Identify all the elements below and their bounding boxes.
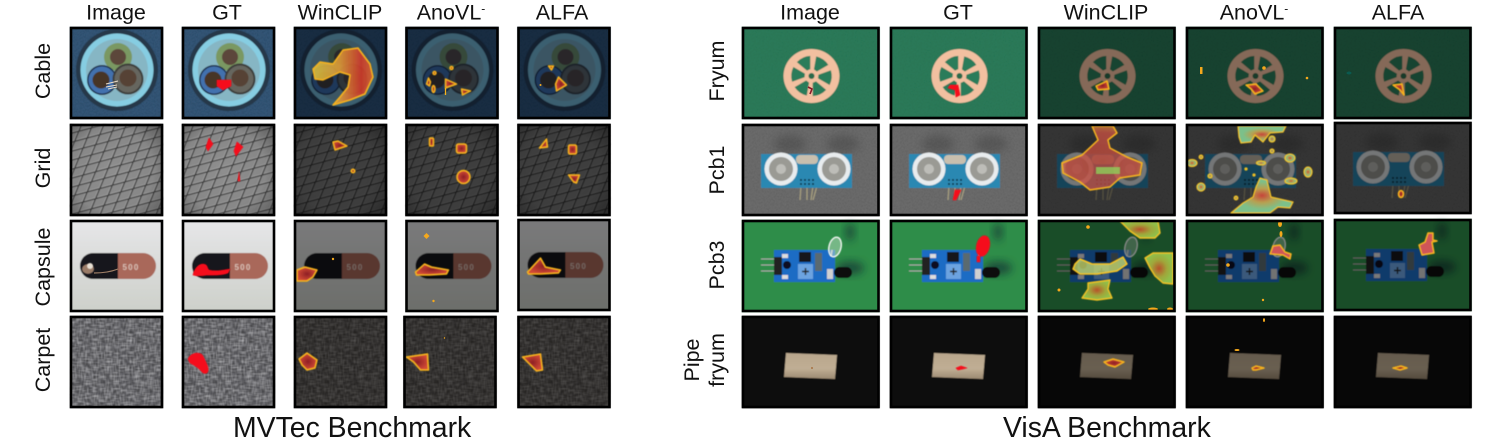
fryum image bbox=[742, 27, 880, 119]
cable ALFA bbox=[518, 27, 610, 119]
pipe fryum GT bbox=[890, 316, 1028, 408]
column headings: VisA bbox=[780, 0, 1425, 24]
column headings: MVTec: GT bbox=[212, 0, 242, 24]
column headings: VisA: ALFA bbox=[1372, 0, 1425, 24]
column headings: VisA: GT bbox=[943, 0, 973, 24]
row label: Cable: Cable bbox=[31, 43, 55, 99]
grid AnoVL bbox=[406, 124, 498, 216]
column headings: MVTec: Image bbox=[86, 0, 146, 24]
cable image bbox=[70, 27, 163, 119]
panel: MVTec benchmark bbox=[31, 0, 610, 444]
carpet WinCLIP bbox=[294, 316, 387, 408]
fryum AnoVL bbox=[1186, 27, 1324, 119]
capsule ALFA bbox=[518, 219, 610, 311]
row label: Capsule: Capsule bbox=[31, 228, 55, 306]
column headings: VisA: WinCLIP bbox=[1064, 0, 1148, 24]
pcb1 image bbox=[742, 124, 880, 216]
cable WinCLIP bbox=[294, 27, 387, 119]
pcb3 WinCLIP bbox=[1038, 220, 1176, 312]
row label: Fryum: Fryum bbox=[705, 41, 729, 101]
column headings: MVTec: ALFA bbox=[536, 0, 589, 24]
column headings: MVTec: WinCLIP bbox=[298, 0, 382, 24]
row label: Carpet: Carpet bbox=[31, 328, 55, 392]
column headings: MVTec: - bbox=[481, 2, 485, 16]
grid WinCLIP bbox=[294, 124, 387, 216]
column headings: MVTec bbox=[86, 0, 589, 24]
row label: Pcb1: Pcb1 bbox=[705, 145, 729, 195]
pcb1 WinCLIP bbox=[1038, 124, 1176, 216]
row label: Pipe fryum: fryum bbox=[705, 333, 729, 387]
pcb1 GT bbox=[890, 124, 1028, 216]
pcb1 AnoVL bbox=[1186, 124, 1324, 216]
pipe fryum image bbox=[742, 316, 880, 408]
carpet image bbox=[70, 316, 163, 408]
cable GT bbox=[182, 27, 275, 119]
pipe fryum ALFA bbox=[1334, 316, 1472, 408]
row label: Pcb3: Pcb3 bbox=[705, 240, 729, 290]
pipe fryum WinCLIP bbox=[1038, 316, 1176, 408]
grid GT bbox=[182, 124, 275, 216]
pcb3 image bbox=[742, 220, 880, 312]
pcb3 AnoVL bbox=[1186, 220, 1324, 312]
row label: Grid: Grid bbox=[31, 148, 55, 188]
row label: Pipe fryum bbox=[680, 333, 729, 387]
capsule image bbox=[70, 220, 163, 312]
column headings: VisA: - bbox=[1284, 2, 1288, 16]
pcb3 ALFA bbox=[1334, 219, 1472, 311]
capsule AnoVL bbox=[406, 220, 498, 312]
caption: VisA Benchmark: VisA Benchmark bbox=[1003, 412, 1212, 444]
column headings: VisA: Image bbox=[780, 0, 840, 24]
capsule WinCLIP bbox=[294, 220, 387, 312]
caption: MVTec Benchmark: MVTec Benchmark bbox=[233, 412, 472, 444]
fryum GT bbox=[890, 27, 1028, 119]
carpet AnoVL bbox=[404, 316, 496, 408]
carpet ALFA bbox=[518, 316, 610, 408]
panel: VisA benchmark bbox=[680, 0, 1472, 444]
pcb3 GT bbox=[890, 220, 1028, 312]
pipe fryum AnoVL bbox=[1186, 316, 1324, 408]
carpet GT bbox=[182, 316, 275, 408]
grid ALFA bbox=[518, 124, 610, 216]
fryum WinCLIP bbox=[1038, 27, 1176, 119]
row label: Pipe fryum: Pipe bbox=[680, 338, 704, 382]
column headings: VisA: AnoVL bbox=[1220, 0, 1284, 24]
pcb1 ALFA bbox=[1334, 122, 1472, 214]
capsule GT bbox=[182, 220, 275, 312]
cable AnoVL bbox=[406, 27, 498, 119]
column headings: MVTec: AnoVL bbox=[417, 0, 481, 24]
fryum ALFA bbox=[1334, 27, 1472, 119]
grid image bbox=[70, 124, 163, 216]
